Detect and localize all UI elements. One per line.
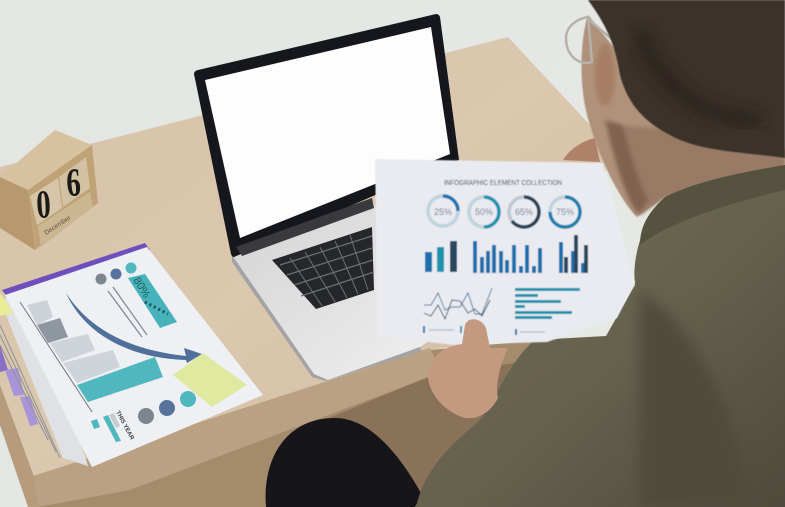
man's face and neck: [582, 15, 785, 217]
bar chart one: [425, 241, 457, 272]
man's hair: [588, 0, 785, 158]
infographic sheet: 75%: [556, 207, 574, 217]
printed reports stack: 80%: [130, 275, 152, 300]
man's fingers behind sheet: [563, 138, 600, 162]
curved arrow: [66, 293, 202, 363]
circles bottom: [138, 408, 154, 424]
calendar digits: [35, 160, 82, 227]
infographic sheet: [375, 159, 635, 345]
donut charts: [428, 196, 580, 227]
calendar digits: 0: [35, 182, 52, 227]
bar chart two: [473, 241, 542, 273]
keyboard: [272, 227, 374, 309]
man's pants: [266, 418, 422, 507]
laptop screen: [194, 14, 459, 257]
wooden calendar block: [0, 130, 98, 250]
calendar digits: 6: [65, 160, 82, 205]
wooden calendar block: December: [43, 214, 73, 237]
horizontal bar chart: [515, 288, 580, 319]
laptop: [194, 14, 459, 381]
yellow tab: [0, 293, 13, 316]
legend marks: [423, 326, 545, 335]
desk: [0, 37, 606, 507]
bar chart three: [559, 235, 588, 273]
infographic sheet: 50%: [475, 207, 493, 217]
infographic sheet: 65%: [515, 207, 533, 217]
teal 80% card: [128, 274, 177, 328]
line chart: [424, 288, 492, 319]
infographic sheet: 25%: [434, 207, 452, 217]
sticky note: [173, 353, 247, 407]
sheet title: INFOGRAPHIC ELEMENT COLLECTION: [444, 180, 562, 187]
man's hand holding sheet: [428, 319, 508, 418]
this year: THIS YEAR: [114, 410, 135, 442]
man's shirt: [416, 165, 785, 507]
circles top: [96, 274, 106, 284]
printed reports stack: [0, 243, 263, 467]
purple tabs: [0, 345, 8, 372]
page bars: [27, 300, 53, 325]
ear: [595, 44, 615, 106]
glasses: [566, 17, 620, 63]
